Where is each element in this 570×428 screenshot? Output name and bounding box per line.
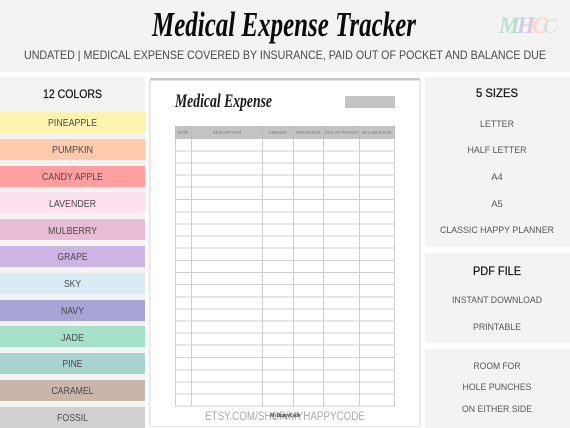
logo: H bbox=[516, 13, 536, 38]
swatch: pine: PINE bbox=[62, 359, 83, 370]
swatch: grape: GRAPE bbox=[58, 252, 88, 263]
sizes list: A5 bbox=[491, 199, 503, 210]
swatch: fossil bbox=[0, 407, 145, 428]
swatch: pine bbox=[0, 353, 145, 374]
swatch: jade: JADE bbox=[61, 333, 84, 344]
heading: 5 sizes: 5 SIZES bbox=[476, 88, 518, 100]
pdf details bbox=[452, 295, 542, 333]
heading: 12 colors: 12 COLORS bbox=[43, 89, 102, 101]
table header: DATE bbox=[178, 130, 189, 135]
table header: DESCRIPTION bbox=[213, 130, 241, 135]
swatch: grape bbox=[0, 246, 145, 267]
sizes list: A4 bbox=[491, 172, 503, 183]
swatch: mulberry: MULBERRY bbox=[48, 226, 97, 237]
swatch: lavender: LAVENDER bbox=[49, 199, 96, 210]
page signature: MyHappyCode bbox=[269, 413, 300, 419]
panel: hole punches: ON EITHER SIDE bbox=[462, 404, 532, 415]
swatch: candy apple: CANDY APPLE bbox=[42, 172, 103, 183]
table header: OUT OF POCKET bbox=[324, 130, 359, 135]
panel: sizes bbox=[425, 77, 570, 247]
panel: colors bbox=[0, 77, 145, 428]
swatch: pineapple: PINEAPPLE bbox=[48, 118, 97, 129]
table header: AMOUNT bbox=[269, 130, 288, 135]
swatch: lavender bbox=[0, 192, 145, 213]
table header: BALANCE DUE bbox=[362, 130, 392, 135]
swatch: navy: NAVY bbox=[61, 306, 84, 317]
swatch: sky: SKY bbox=[64, 279, 81, 290]
sizes list: CLASSIC HAPPY PLANNER bbox=[440, 225, 554, 236]
heading: pdf file: PDF FILE bbox=[473, 266, 521, 278]
sizes list: LETTER bbox=[480, 119, 514, 130]
swatch: sky bbox=[0, 273, 145, 294]
logo: M bbox=[498, 13, 521, 38]
panel: pdf file bbox=[425, 253, 570, 343]
table header: INSURANCE bbox=[296, 130, 321, 135]
table header bbox=[175, 126, 395, 139]
swatch: pineapple bbox=[0, 112, 145, 133]
sizes list: HALF LETTER bbox=[468, 145, 527, 156]
swatch: candy apple bbox=[0, 166, 145, 187]
panel: hole punches: ROOM FOR bbox=[474, 361, 521, 372]
page title: Medical Expense bbox=[174, 92, 272, 112]
swatch: jade bbox=[0, 326, 145, 347]
logo bbox=[498, 13, 558, 38]
shop url: ETSY.COM/SHOP/MYHAPPYCODE bbox=[205, 411, 365, 423]
swatch: navy bbox=[0, 300, 145, 321]
date box bbox=[345, 96, 395, 108]
sizes list bbox=[440, 119, 554, 236]
title: Medical Expense Tracker bbox=[151, 5, 416, 44]
logo: C bbox=[543, 14, 558, 38]
table bbox=[175, 126, 395, 406]
swatch: mulberry bbox=[0, 219, 145, 240]
logo: C bbox=[532, 13, 548, 38]
swatch: caramel bbox=[0, 380, 145, 401]
header band bbox=[0, 0, 570, 72]
pdf details: INSTANT DOWNLOAD bbox=[452, 295, 542, 306]
panel: hole punches bbox=[425, 349, 570, 428]
panel: hole punches: HOLE PUNCHES bbox=[462, 382, 532, 393]
pdf details: PRINTABLE bbox=[473, 322, 521, 333]
swatch: pumpkin bbox=[0, 139, 145, 160]
swatch: caramel: CARAMEL bbox=[52, 386, 94, 397]
swatch: pumpkin: PUMPKIN bbox=[52, 145, 93, 156]
panel: planner page preview bbox=[150, 78, 420, 426]
swatch: fossil: FOSSIL bbox=[57, 413, 88, 424]
